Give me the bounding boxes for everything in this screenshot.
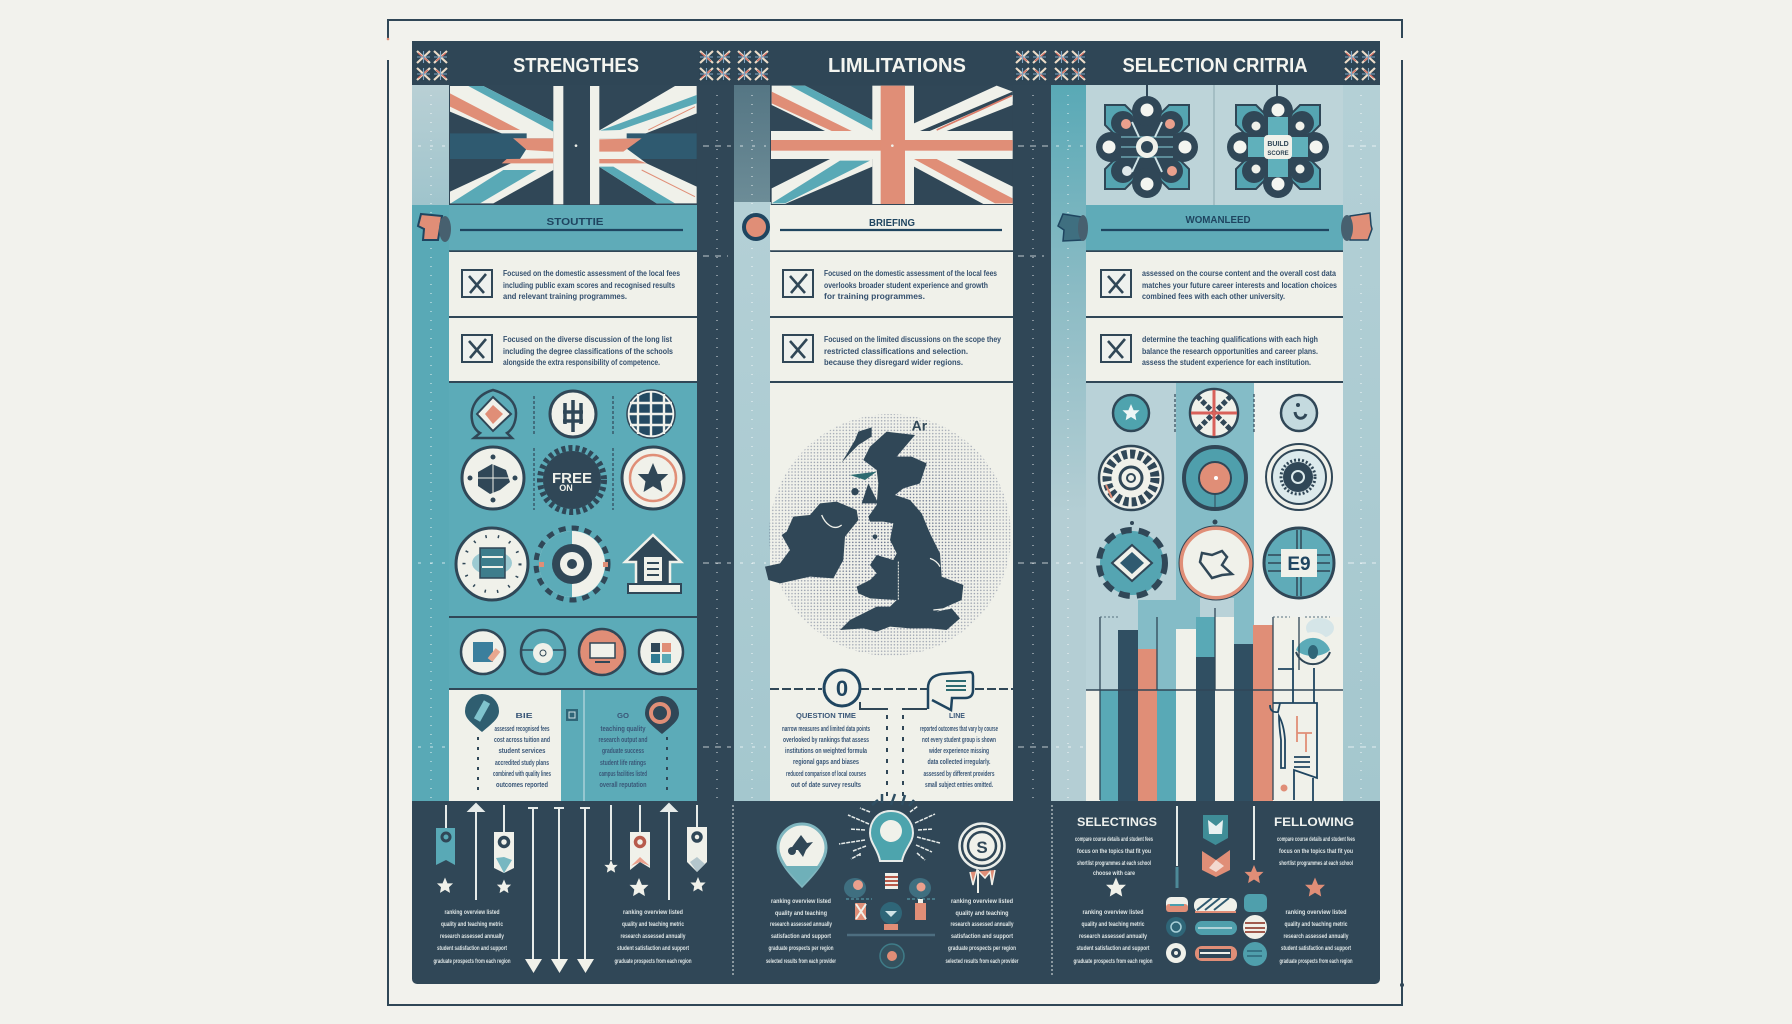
text: left notes: selected results from each provider [766, 958, 836, 965]
panel: limitations bottom icons [766, 794, 1052, 975]
info block: strengths notes: teaching quality [600, 726, 646, 733]
left strip [734, 85, 771, 801]
info block: strengths notes: GO [617, 713, 630, 720]
icon: rosette 2: SCORE [1267, 151, 1289, 157]
banner: criteria [1058, 205, 1372, 251]
text: right notes: ranking overview listed [623, 909, 683, 916]
text: right note: not every student group is shown [922, 737, 996, 744]
text: left note: reduced comparison of local courses [786, 771, 866, 778]
text: right note [920, 713, 998, 789]
text: fellowing upper notes: focus on the topics that fit you [1279, 848, 1353, 855]
icon: flag coin [1190, 389, 1238, 437]
text: right notes: research assessed annually [950, 921, 1014, 928]
icon: cross medallion [1179, 520, 1253, 600]
icon: shields [1202, 815, 1230, 877]
text: right notes: research assessed annually [620, 933, 686, 940]
banner: criteria: WOMANLEED [1186, 215, 1250, 226]
icon: concentric target [959, 823, 1005, 893]
icon: label medallion [1264, 528, 1334, 598]
main dark board [412, 41, 1380, 984]
dotted circle [769, 414, 1011, 656]
text: selecting upper notes [1075, 836, 1153, 877]
card: limitations 1 [770, 252, 1013, 316]
text: left notes: graduate prospects per region [768, 945, 834, 952]
text: right note: reported outcomes that vary by course [920, 726, 998, 733]
text: right note: assessed by different providers [924, 771, 995, 778]
icon: glyph coin [550, 391, 596, 437]
map: British Isles: Ar [912, 418, 928, 434]
card: limitations 1: for training programmes. [824, 292, 925, 301]
connector lines [770, 689, 1013, 800]
card: strengths 1: and relevant training programmes. [503, 292, 627, 301]
card: criteria 2: assess the student experience for each institution. [1142, 358, 1311, 367]
text: left notes: research assessed annually [440, 933, 504, 940]
text: left note [782, 713, 870, 789]
down arrows [525, 807, 594, 973]
text: right notes: graduate prospects from each region [614, 958, 692, 965]
map panel [765, 383, 1013, 801]
panel: limitations column [734, 85, 1048, 801]
icon: patterned medallion [1099, 446, 1163, 510]
text: left notes: quality and teaching [775, 910, 827, 917]
card: strengths 2 [449, 317, 697, 382]
text: left notes: ranking overview listed [771, 898, 831, 905]
card: criteria 1: assessed on the course content and the overall cost data [1142, 269, 1336, 278]
outer frame [387, 20, 1404, 1005]
icon: zero circle: 0 [836, 676, 848, 701]
panel: selection criteria column [1051, 85, 1380, 801]
info block: strengths notes: research output and [598, 737, 648, 744]
card: limitations 2: Focused on the limited discussions on the scope they [824, 335, 1001, 344]
card: limitations 2: restricted classifications and selection. [824, 347, 968, 356]
header bar [412, 41, 1380, 85]
text: right notes: student satisfaction and support [617, 945, 690, 952]
text: left notes: student satisfaction and support [437, 945, 508, 952]
stars [437, 805, 706, 896]
info block: strengths notes: accredited study plans [495, 760, 549, 767]
bar chart [1086, 608, 1343, 801]
text: selecting lower notes: student satisfaction and support [1076, 945, 1150, 952]
icon: striped shield coin [461, 630, 505, 674]
icon: free badge [540, 448, 604, 512]
heading: selection criteria: SELECTION CRITRIA [1122, 55, 1308, 77]
text: fellowing lower notes: graduate prospects from each region [1280, 958, 1353, 965]
text: right notes: quality and teaching [956, 910, 1009, 917]
text: right note: wider experience missing [928, 748, 989, 755]
info block: strengths notes: graduate success [602, 748, 644, 755]
icon: clock server [456, 528, 528, 600]
vertical rules with star [1177, 806, 1264, 888]
icon: target [1184, 447, 1246, 510]
icon: pin teal [465, 694, 499, 732]
heading: strengths: STRENGTHES [513, 55, 639, 77]
right dark gutter markers [703, 95, 731, 800]
icon: location pin with leaf [778, 824, 826, 886]
icon: compass map [462, 447, 524, 509]
card: criteria 2: determine the teaching qualifications with each high [1142, 335, 1318, 344]
flag: strengths [450, 86, 697, 204]
info block: strengths notes: assessed recognised fees [494, 726, 550, 733]
icon: gear medallion [1099, 521, 1165, 596]
icons: pills and badges [1166, 894, 1267, 966]
text: selecting upper notes: shortlist programmes at each school [1077, 860, 1151, 867]
text: right note: small subject entries omitted. [925, 782, 993, 789]
icon: zero circle [824, 670, 860, 706]
card: strengths 1 [449, 252, 697, 316]
text: selecting upper notes: choose with care [1093, 870, 1135, 877]
info block: strengths notes: campus facilities listed [599, 771, 647, 778]
text: fellowing lower notes [1280, 909, 1353, 965]
icons: small cluster [844, 873, 935, 968]
icon: label medallion: E9 [1287, 554, 1311, 575]
text: left notes: ranking overview listed [444, 909, 500, 916]
text: left note: out of date survey results [791, 782, 861, 789]
info block: strengths notes: cost across tuition and [494, 737, 550, 744]
text: fellowing lower notes: ranking overview listed [1286, 909, 1347, 916]
text: right notes [614, 909, 692, 965]
text: fellowing lower notes: student satisfaction and support [1281, 945, 1352, 952]
info block: strengths notes [449, 690, 697, 801]
icon: pin salmon [645, 696, 679, 734]
text: fellowing lower notes: quality and teaching metric [1284, 921, 1348, 928]
icon: concentric target: S [976, 838, 988, 857]
icon: star coin [1113, 395, 1149, 431]
text: selecting lower notes: graduate prospects from each region [1074, 958, 1153, 965]
text: selecting lower notes [1074, 909, 1153, 965]
text: left note: regional gaps and biases [793, 759, 859, 766]
icon: monitor coin [579, 629, 625, 675]
icon: hook coin [1281, 395, 1317, 431]
icon: star seal [622, 447, 684, 509]
text: left note: institutions on weighted formula [785, 748, 867, 755]
card: limitations 2 [770, 317, 1013, 382]
text: left notes: graduate prospects from each region [434, 958, 511, 965]
icon: ring coin [521, 630, 565, 674]
icon: globe [627, 390, 675, 438]
card: criteria 1: combined fees with each other university. [1142, 292, 1285, 301]
icon: light bulb with rays [839, 794, 940, 861]
text: fellowing upper notes: compare course details and student fees [1277, 836, 1355, 843]
text: right notes: satisfaction and support [951, 933, 1014, 940]
info block: strengths notes: overall reputation [600, 782, 646, 789]
text: left note: QUESTION TIME [796, 713, 856, 720]
panel: strengths column [412, 85, 731, 801]
panel: strengths bottom tags and arrows [434, 804, 733, 975]
text: right notes [946, 898, 1019, 965]
icon: document with pen [1270, 640, 1317, 801]
card: strengths 2: alongside the extra responsibility of competence. [503, 358, 660, 367]
card: limitations 1: overlooks broader student experience and growth [824, 281, 988, 290]
right strip [1343, 85, 1380, 801]
left strip [412, 85, 450, 801]
text: selecting upper notes: compare course details and student fees [1075, 836, 1153, 843]
text: fellowing upper notes [1277, 836, 1355, 867]
left strip [1051, 85, 1086, 801]
heading: selectings: SELECTINGS [1077, 815, 1157, 829]
info block: strengths notes: student services [498, 748, 546, 755]
banner: limitations [744, 205, 1013, 251]
icon: splat medallion [1266, 444, 1332, 510]
icon: shield pin [472, 390, 516, 438]
text: left notes: quality and teaching metric [441, 921, 503, 928]
card: strengths 1: Focused on the domestic assessment of the local fees [503, 269, 680, 278]
top panel with rosettes [1086, 85, 1343, 205]
heading: fellowing: FELLOWING [1274, 815, 1354, 829]
icon grid: strengths [449, 383, 697, 689]
icon: rosette 1 [1096, 96, 1198, 198]
text: selecting upper notes: focus on the topics that fit you [1077, 848, 1151, 855]
icon: tiles coin [639, 630, 683, 674]
text: fellowing upper notes: shortlist programmes at each school [1279, 860, 1353, 867]
banner: strengths [418, 205, 697, 251]
card: strengths 1: including public exam scores and recognised results [503, 281, 675, 290]
card: strengths 2: Focused on the diverse discussion of the long list [503, 335, 672, 344]
text: left notes: research assessed annually [770, 921, 832, 928]
text: selecting lower notes: quality and teaching metric [1082, 921, 1145, 928]
info block: strengths notes: student life ratings [600, 760, 646, 767]
icon: star white [1106, 878, 1126, 897]
flag: limitations [771, 86, 1013, 204]
panel: selection bottom block [1074, 806, 1355, 966]
icons: header mini flags [416, 50, 1376, 81]
up arrows [469, 804, 676, 900]
text: left note: narrow measures and limited data points [782, 726, 870, 733]
icon grid background [1086, 383, 1343, 690]
icon: star salmon [1305, 878, 1325, 897]
text: right note: data collected irregularly. [928, 759, 991, 766]
card: criteria 2 [1086, 317, 1343, 382]
info block: strengths notes: combined with quality lines [493, 771, 551, 778]
map: British Isles [765, 418, 963, 632]
info block: strengths notes: BIE [516, 713, 533, 720]
card: criteria 1 [1086, 252, 1343, 316]
icon: gear [536, 528, 608, 600]
text: right notes: ranking overview listed [951, 898, 1013, 905]
text: right note: LINE [949, 713, 965, 720]
text: selecting lower notes: research assessed annually [1079, 933, 1147, 940]
tags and stems [436, 805, 707, 873]
card: criteria 2: balance the research opportunities and career plans. [1142, 347, 1318, 356]
icon: speech bubble [928, 672, 973, 710]
icon: eye lens [1295, 617, 1334, 670]
info block: strengths notes: outcomes reported [496, 782, 548, 789]
icon: rosette 2: BUILD [1267, 141, 1289, 148]
text: right notes: quality and teaching metric [622, 921, 684, 928]
text: right notes: selected results from each provider [946, 958, 1019, 965]
icon: free badge: ON [559, 483, 573, 493]
icon: rosette 2 [1227, 96, 1329, 198]
banner: limitations: BRIEFING [869, 218, 915, 229]
text: left notes [766, 898, 836, 965]
text: right notes: graduate prospects per region [948, 945, 1016, 952]
text: left notes [434, 909, 511, 965]
card: limitations 2: because they disregard wider regions. [824, 358, 963, 367]
card: criteria 1: matches your future career interests and location choices [1142, 281, 1337, 290]
text: left notes: satisfaction and support [771, 933, 832, 940]
heading: limitations: LIMLITATIONS [828, 55, 966, 77]
banner: strengths: STOUTTIE [546, 217, 604, 228]
text: left note: overlooked by rankings that assess [783, 737, 869, 744]
text: selecting lower notes: ranking overview listed [1082, 909, 1144, 916]
icon: free badge: FREE [552, 470, 592, 487]
icon: small square [566, 709, 578, 721]
right dark gutter markers [1018, 95, 1048, 800]
card: limitations 1: Focused on the domestic assessment of the local fees [824, 269, 997, 278]
icon: house [625, 535, 681, 593]
card: strengths 2: including the degree classifications of the schools [503, 347, 673, 356]
text: fellowing lower notes: research assessed annually [1284, 933, 1349, 940]
